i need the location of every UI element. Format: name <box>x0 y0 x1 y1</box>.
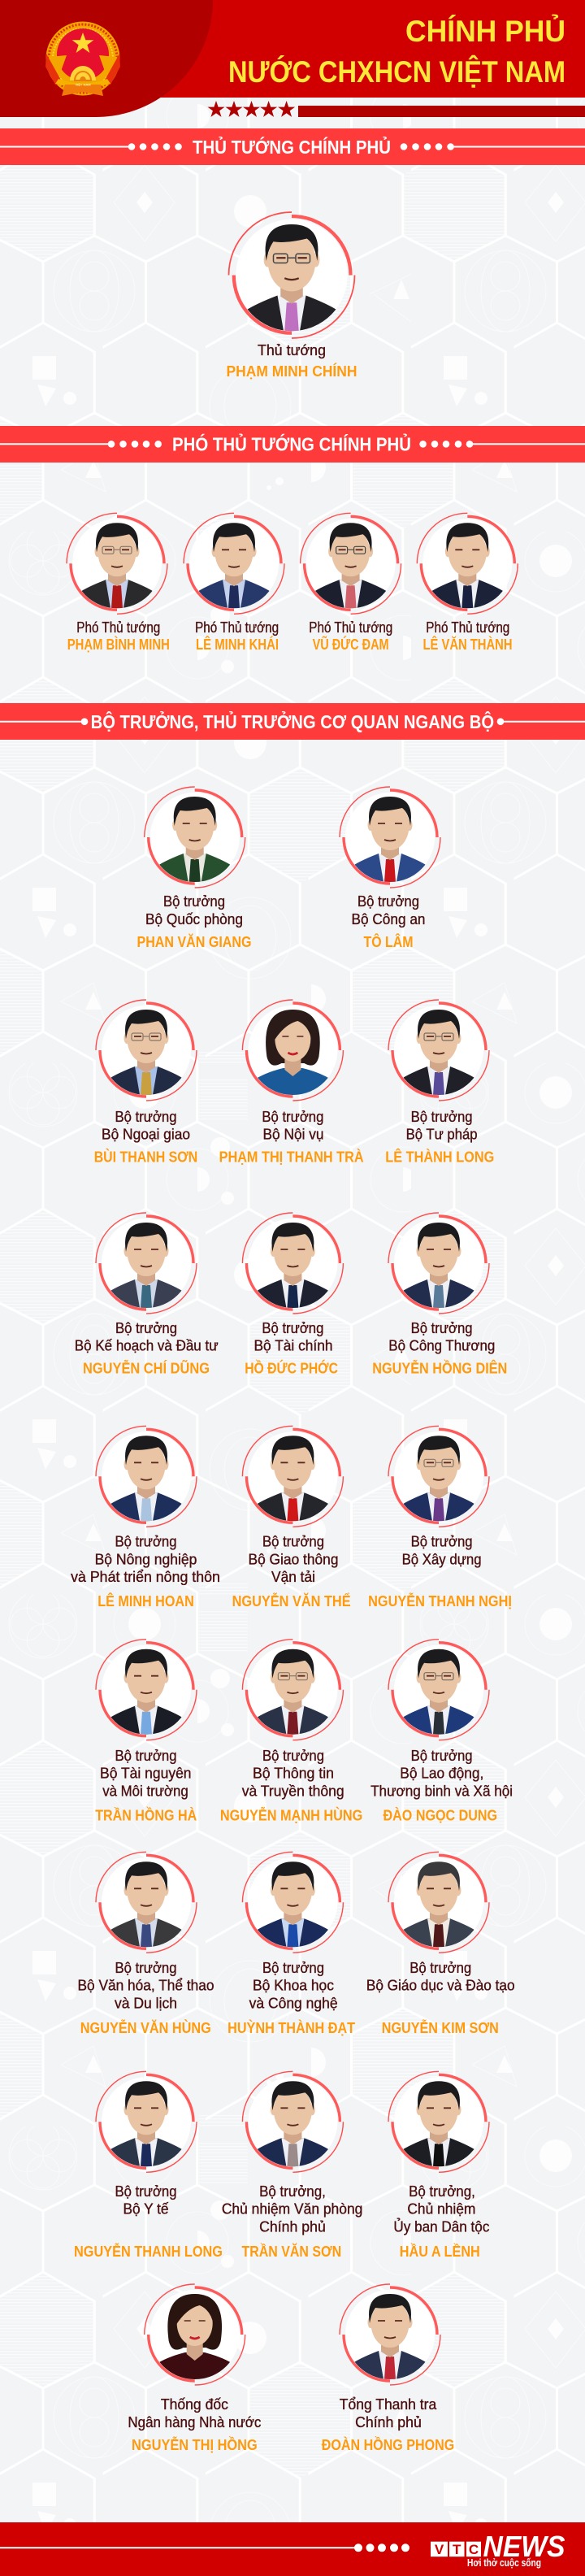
deputy: Vũ Đức Đam <box>301 513 401 653</box>
role: Bộ Y tế <box>124 2201 169 2218</box>
role: Chủ nhiệm <box>407 2201 475 2218</box>
role <box>402 1534 482 1567</box>
role <box>388 1320 495 1354</box>
role <box>78 1960 214 2011</box>
role: Bộ Nội vụ <box>263 1127 323 1143</box>
prime minister: Phạm Minh Chính <box>226 212 358 380</box>
portrait <box>145 787 245 888</box>
minister: Trần Văn Sơn <box>222 2071 362 2260</box>
name: NGUYỄN VĂN HÙNG <box>80 2019 211 2036</box>
portrait <box>96 1852 197 1953</box>
minister: Nguyễn Thanh Long <box>74 2071 223 2260</box>
dark bar <box>298 106 585 117</box>
portrait <box>340 787 440 888</box>
minister: Lê Minh Hoan <box>71 1426 220 1609</box>
portrait <box>340 2284 440 2385</box>
minister: Nguyễn Chí Dũng <box>75 1213 219 1376</box>
role: Bộ Ngoại giao <box>102 1127 190 1143</box>
portrait <box>96 2071 197 2172</box>
governor: Nguyễn Thị Hồng <box>128 2284 261 2453</box>
name: NGUYỄN THANH NGHỊ <box>368 1592 512 1609</box>
minister: Lê Thành Long <box>385 1000 494 1165</box>
section banner: Thủ tướng <box>0 128 585 165</box>
name: HUỲNH THÀNH ĐẠT <box>228 2019 356 2036</box>
role: Bộ trưởng, <box>259 2183 326 2200</box>
role <box>242 1748 344 1799</box>
role: Bộ Kế hoạch và Đầu tư <box>75 1338 219 1354</box>
role: Bộ trưởng <box>115 1960 177 1976</box>
role: Bộ Thông tin <box>253 1766 334 1782</box>
name: NGUYỄN THANH LONG <box>74 2243 223 2260</box>
role: Bộ trưởng <box>163 893 225 910</box>
minister: Bùi Thanh Sơn <box>94 1000 197 1165</box>
footer <box>0 2522 585 2576</box>
name: PHAN VĂN GIANG <box>136 933 252 950</box>
minister: Đào Ngọc Dung <box>370 1640 513 1823</box>
role: Bộ trưởng <box>411 1109 473 1125</box>
role: Bộ Nông nghiệp <box>95 1551 197 1567</box>
role <box>366 1960 515 1994</box>
role: Thủ tướng <box>258 342 326 358</box>
role <box>393 2183 489 2235</box>
role <box>351 893 426 927</box>
header dark quarter circle <box>0 0 213 117</box>
role: Bộ trưởng <box>411 1748 473 1764</box>
name: NGUYỄN KIM SƠN <box>382 2019 499 2036</box>
role: Bộ Giáo dục và Đào tạo <box>366 1978 515 1994</box>
portrait <box>388 1213 489 1314</box>
role <box>128 2396 261 2430</box>
portrait <box>242 1852 343 1953</box>
role: Chính phủ <box>355 2414 422 2430</box>
portrait <box>184 513 284 614</box>
role: Phó Thủ tướng <box>195 619 279 636</box>
role: Bộ Công an <box>351 911 426 927</box>
title: CHÍNH PHỦ <box>405 14 566 48</box>
deputy: Phạm Bình Minh <box>67 513 170 653</box>
minister: Nguyễn Thanh Nghị <box>368 1426 512 1609</box>
role: Bộ trưởng <box>262 1748 324 1764</box>
minister: Hồ Đức Phớc <box>242 1213 343 1376</box>
minister: Nguyễn Hồng Diên <box>372 1213 507 1376</box>
VTC News logo <box>431 2530 566 2569</box>
name: LÊ MINH HOAN <box>98 1592 194 1609</box>
role: Bộ Công Thương <box>388 1338 495 1354</box>
minister: Trần Hồng Hà <box>95 1640 197 1823</box>
name: LÊ THÀNH LONG <box>385 1148 494 1165</box>
inspector general: Đoàn Hồng Phong <box>322 2284 454 2453</box>
role: Chính phủ <box>259 2218 326 2235</box>
name: ĐÀO NGỌC DUNG <box>384 1806 497 1823</box>
role: Ngân hàng Nhà nước <box>128 2414 261 2430</box>
portrait <box>145 2284 245 2385</box>
portrait <box>388 1852 489 1953</box>
name: TÔ LÂM <box>364 933 413 950</box>
role <box>71 1534 220 1585</box>
role: Bộ trưởng <box>115 1109 177 1125</box>
minister: Tô Lâm <box>340 787 440 950</box>
role: Bộ Tài nguyên <box>100 1766 192 1782</box>
role: Bộ trưởng <box>262 1960 324 1976</box>
role <box>100 1748 192 1799</box>
role: Bộ Tư pháp <box>406 1127 478 1143</box>
portrait <box>242 1213 343 1314</box>
name: NGUYỄN VĂN THỂ <box>232 1592 351 1609</box>
portrait <box>388 2071 489 2172</box>
portrait <box>301 513 401 614</box>
name: TRẦN HỒNG HÀ <box>95 1806 197 1823</box>
role: Chủ nhiệm Văn phòng <box>222 2201 362 2218</box>
role <box>145 893 243 927</box>
VTC News logo: T <box>453 2542 462 2557</box>
minister: Phan Văn Giang <box>136 787 252 950</box>
name: NGUYỄN MẠNH HÙNG <box>220 1806 362 1823</box>
role: Tổng Thanh tra <box>340 2396 437 2413</box>
name: LÊ MINH KHÁI <box>196 636 279 653</box>
name: HẦU A LỀNH <box>400 2243 480 2260</box>
role: Bộ trưởng, <box>409 2183 475 2200</box>
role: Vận tải <box>271 1569 315 1585</box>
role: Bộ Xây dựng <box>402 1551 482 1567</box>
portrait <box>388 1640 489 1740</box>
name: PHẠM THỊ THANH TRÀ <box>219 1148 364 1165</box>
role <box>254 1320 333 1354</box>
role: Bộ trưởng <box>115 1320 177 1336</box>
role: Bộ trưởng <box>262 1109 323 1125</box>
role: và Du lịch <box>115 1995 177 2011</box>
role: Bộ trưởng <box>262 1320 323 1336</box>
role: Bộ Quốc phòng <box>145 911 243 927</box>
role: và Môi trường <box>102 1783 188 1799</box>
role <box>370 1748 513 1799</box>
portrait <box>388 1426 489 1527</box>
minister: Nguyễn Mạnh Hùng <box>220 1640 362 1823</box>
role <box>102 1109 190 1143</box>
name: PHẠM MINH CHÍNH <box>226 363 358 380</box>
icon: national emblem <box>46 21 120 96</box>
portrait <box>242 2071 343 2172</box>
portrait <box>242 1640 343 1740</box>
minister: Hầu A Lềnh <box>388 2071 489 2260</box>
role: Bộ trưởng <box>411 1320 473 1336</box>
role: Thống đốc <box>161 2396 228 2413</box>
header <box>0 0 585 117</box>
role: Bộ Tài chính <box>254 1338 333 1354</box>
title <box>228 14 566 89</box>
VTC News logo: Hơi thở cuộc sống <box>467 2557 541 2569</box>
minister: Nguyễn Văn Thể <box>232 1426 351 1609</box>
portrait <box>242 1426 343 1527</box>
minister: Nguyễn Kim Sơn <box>366 1852 515 2036</box>
role: Bộ Văn hóa, Thể thao <box>78 1978 214 1994</box>
header red band <box>0 0 585 98</box>
role: Bộ trưởng <box>262 1534 324 1550</box>
role: Bộ trưởng <box>411 1534 473 1550</box>
VTC News logo: NEWS <box>483 2530 566 2563</box>
name: TRẦN VĂN SƠN <box>242 2243 341 2260</box>
role: và Công nghệ <box>249 1995 338 2011</box>
role: Bộ trưởng <box>115 2183 177 2200</box>
name: PHẠM BÌNH MINH <box>67 636 170 653</box>
role: Thương binh và Xã hội <box>370 1783 513 1799</box>
role: Phó Thủ tướng <box>76 619 160 636</box>
minister: Nguyễn Văn Hùng <box>78 1852 214 2036</box>
minister: Phạm Thị Thanh Trà <box>219 1000 364 1165</box>
VTC News logo: V <box>435 2542 444 2557</box>
role: Ủy ban Dân tộc <box>393 2218 489 2235</box>
role <box>75 1320 219 1354</box>
name: HỒ ĐỨC PHỚC <box>245 1359 338 1376</box>
section banner: Bộ trưởng <box>0 703 585 740</box>
name: ĐOÀN HỒNG PHONG <box>322 2436 454 2453</box>
portrait <box>229 212 354 338</box>
portrait <box>96 1000 197 1101</box>
role <box>249 1534 338 1585</box>
section banner: Bộ trưởng: BỘ TRƯỞNG, THỦ TRƯỞNG CƠ QUAN NGANG BỘ <box>91 710 494 732</box>
role: Bộ Lao động, <box>400 1766 483 1782</box>
name: NGUYỄN CHÍ DŨNG <box>83 1359 210 1376</box>
deputy: Lê Minh Khái <box>184 513 284 653</box>
role: Bộ Giao thông <box>249 1551 338 1567</box>
role: và Truyền thông <box>242 1783 344 1799</box>
role <box>262 1109 323 1143</box>
five stars <box>208 101 295 117</box>
portrait <box>388 1000 489 1101</box>
role <box>249 1960 338 2011</box>
role: và Phát triển nông thôn <box>71 1569 220 1585</box>
role <box>406 1109 478 1143</box>
minister: Huỳnh Thành Đạt <box>228 1852 356 2036</box>
VTC News logo: C <box>469 2542 479 2557</box>
role: Phó Thủ tướng <box>426 619 509 636</box>
portrait <box>67 513 167 614</box>
section banner: Thủ tướng: THỦ TƯỚNG CHÍNH PHỦ <box>193 135 391 158</box>
role: Bộ trưởng <box>358 893 419 910</box>
portrait <box>96 1213 197 1314</box>
role: Bộ trưởng <box>410 1960 471 1976</box>
role: Bộ trưởng <box>115 1534 177 1550</box>
portrait <box>96 1640 197 1740</box>
section banner: Phó Thủ tướng <box>0 426 585 463</box>
name: VŨ ĐỨC ĐAM <box>313 636 389 653</box>
name: BÙI THANH SƠN <box>94 1148 197 1165</box>
role <box>222 2183 362 2235</box>
portrait <box>242 1000 343 1101</box>
portrait <box>96 1426 197 1527</box>
name: NGUYỄN HỒNG DIÊN <box>372 1359 507 1376</box>
deputy: Lê Văn Thành <box>417 513 518 653</box>
name: NGUYỄN THỊ HỒNG <box>132 2436 258 2453</box>
role <box>115 2183 177 2218</box>
portrait <box>417 513 518 614</box>
role <box>340 2396 437 2430</box>
role: Bộ trưởng <box>115 1748 177 1764</box>
section banner: Phó Thủ tướng: PHÓ THỦ TƯỚNG CHÍNH PHỦ <box>172 432 411 455</box>
role: Bộ Khoa học <box>253 1978 334 1994</box>
name: LÊ VĂN THÀNH <box>422 636 512 653</box>
icon: national emblem: VIỆT NAM <box>75 83 91 86</box>
role: Phó Thủ tướng <box>309 619 392 636</box>
